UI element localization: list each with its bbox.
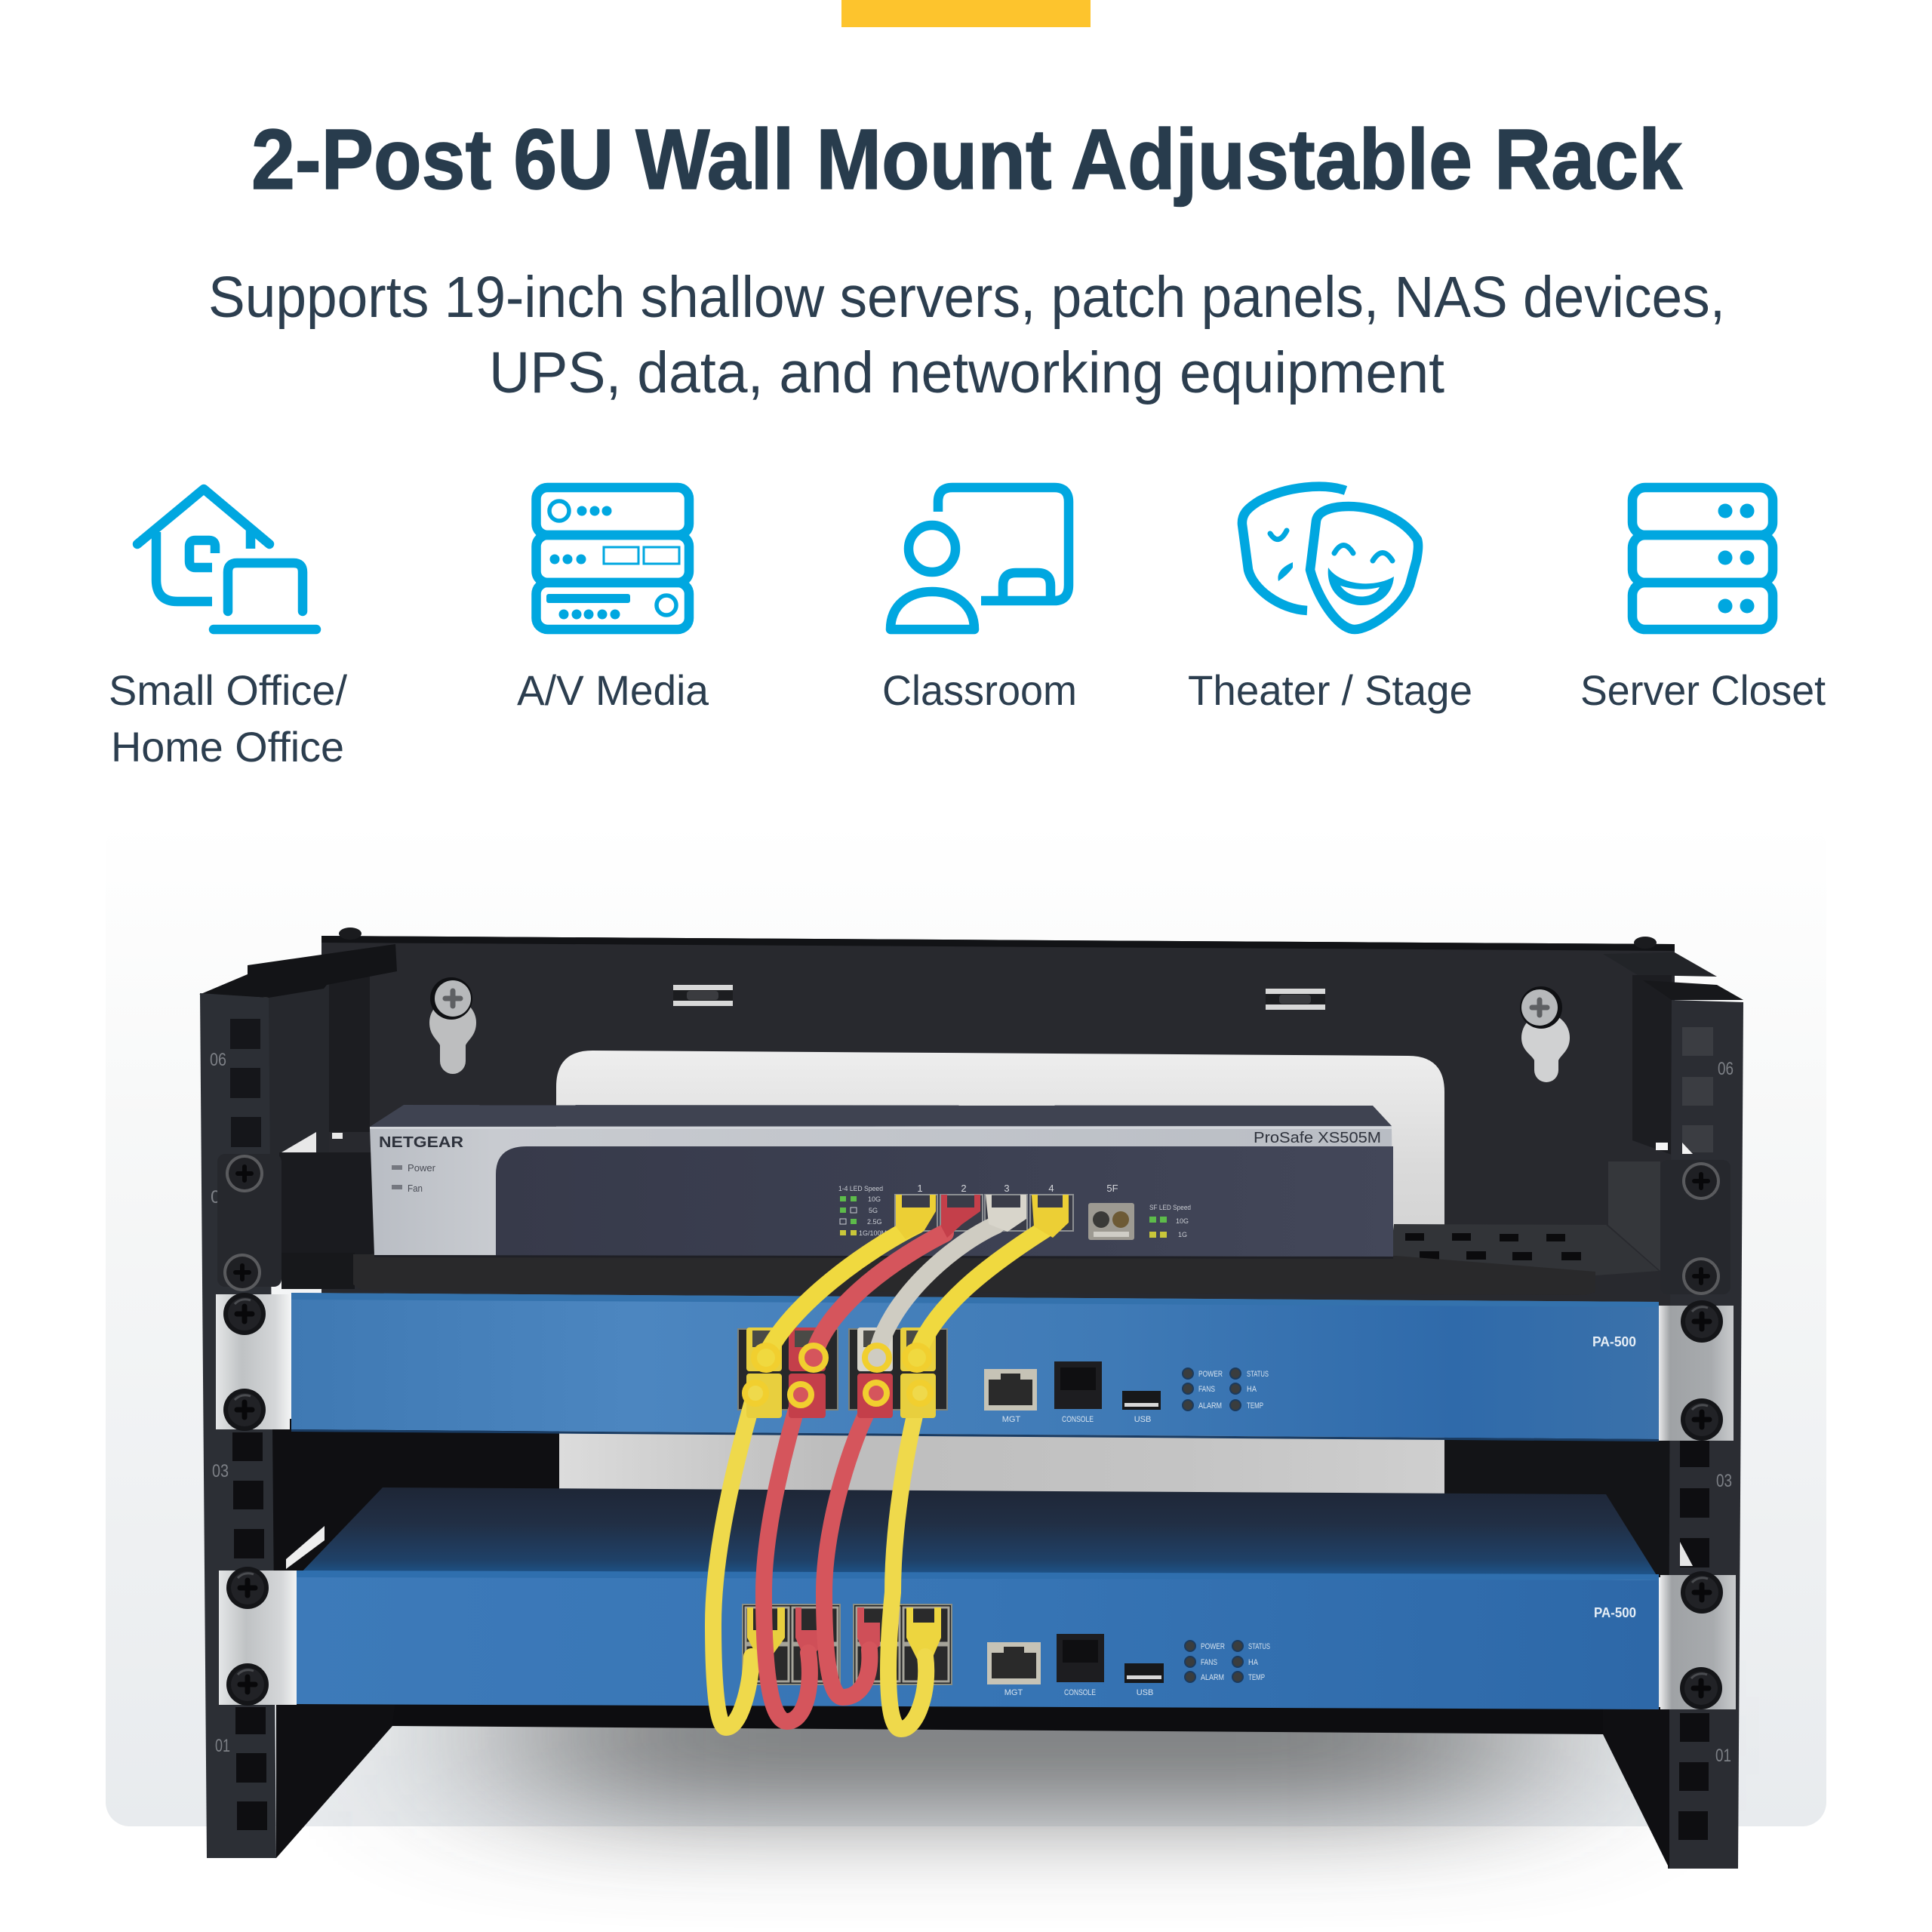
label: Theater / Stage <box>1188 666 1472 714</box>
port numbers <box>917 1183 1118 1194</box>
panel text and LEDs: CONSOLE <box>1062 1415 1094 1424</box>
panel: image background <box>106 823 1826 1826</box>
RJ45 ports <box>895 1195 1073 1231</box>
label: Home Office <box>111 723 344 771</box>
icon: house with laptop <box>137 489 316 629</box>
left rack post: 03 <box>212 1461 229 1481</box>
lower rack shelf and feet <box>276 1690 1669 1869</box>
panel text and LEDs: POWER <box>1198 1370 1223 1379</box>
panel text and LEDs: STATUS <box>1247 1370 1269 1379</box>
icon: person with screen <box>891 488 1069 629</box>
status LEDs: 1G/100M <box>859 1229 887 1237</box>
keyhole right with screw <box>1520 986 1570 1082</box>
brand and model text <box>379 1130 1381 1194</box>
label: Server Closet <box>1580 666 1826 714</box>
use case: server closet <box>1580 488 1826 714</box>
port numbers: 1 <box>917 1183 923 1194</box>
plate cutout window <box>556 1051 1444 1283</box>
left rack post: 01 <box>215 1736 230 1756</box>
photo: rack with mounted equipment <box>199 928 1743 1869</box>
subtitle <box>208 265 1725 405</box>
shelf mounting ears with screws <box>217 1154 1730 1295</box>
upper PA-500 firewall <box>291 1293 1659 1441</box>
lower device top surface <box>297 1487 1659 1579</box>
network ports <box>743 1604 952 1684</box>
left rack post: 06 <box>210 1050 226 1070</box>
Netgear switch <box>370 1105 1393 1259</box>
subtitle: UPS, data, and networking equipment <box>489 340 1444 405</box>
port numbers: 2 <box>961 1183 967 1194</box>
status LEDs <box>838 1185 1191 1238</box>
port numbers: 4 <box>1048 1183 1054 1194</box>
subtitle: Supports 19-inch shallow servers, patch panels, NAS devices, <box>208 265 1725 330</box>
label <box>109 666 347 771</box>
use case: A/V media <box>517 488 709 714</box>
title: 2-Post 6U Wall Mount Adjustable Rack <box>251 112 1682 207</box>
icon: A/V equipment stack <box>536 488 689 629</box>
keyhole left with screw <box>429 977 476 1074</box>
right rack post: 01 <box>1715 1746 1731 1766</box>
panel text and LEDs <box>1002 1368 1269 1424</box>
rear wall plate <box>321 928 1675 1317</box>
top accent bar <box>841 0 1091 27</box>
panel text and LEDs: STATUS <box>1248 1642 1270 1651</box>
long patch cables <box>713 1391 926 1729</box>
icon: theater masks <box>1242 487 1418 629</box>
panel text and LEDs: USB <box>1137 1688 1153 1697</box>
right rack post <box>1603 952 1743 1869</box>
label: A/V Media <box>517 666 709 714</box>
silver ears for firewalls with screws <box>216 1293 1736 1709</box>
status LEDs: 10G <box>1176 1217 1189 1225</box>
panel text and LEDs: POWER <box>1201 1642 1225 1651</box>
right rack post: 06 <box>1718 1059 1734 1079</box>
panel text and LEDs: ALARM <box>1201 1673 1224 1682</box>
use case: classroom <box>882 488 1077 714</box>
panel text and LEDs: MGT <box>1002 1415 1020 1424</box>
management ports <box>984 1361 1161 1411</box>
panel text and LEDs: ALARM <box>1198 1401 1222 1411</box>
brand and model text: NETGEAR <box>379 1134 464 1151</box>
management ports <box>987 1634 1164 1684</box>
status LEDs: 1-4 LED Speed <box>838 1185 883 1192</box>
use case: small office / home office <box>109 489 347 771</box>
lower PA-500 firewall: PA-500 <box>1594 1605 1636 1620</box>
panel text and LEDs <box>1004 1641 1270 1697</box>
port numbers: 3 <box>1004 1183 1010 1194</box>
left rack post <box>199 944 397 1858</box>
switch plug heads <box>896 1195 1069 1239</box>
label: Classroom <box>882 666 1077 714</box>
panel text and LEDs: MGT <box>1004 1688 1023 1697</box>
panel text and LEDs: FANS <box>1201 1658 1217 1667</box>
use case: theater / stage <box>1188 487 1472 714</box>
status LEDs: 2.5G <box>867 1218 882 1226</box>
panel text and LEDs: CONSOLE <box>1064 1688 1096 1697</box>
brand and model text: ProSafe XS505M <box>1254 1130 1381 1146</box>
cable collars upper row <box>754 1346 929 1370</box>
panel text and LEDs: TEMP <box>1247 1401 1263 1411</box>
left rack post: 0 <box>211 1187 220 1208</box>
mounting slots <box>673 985 1325 1010</box>
upper port connectors <box>745 1327 936 1418</box>
status LEDs: 10G <box>868 1195 881 1203</box>
right rack post: 03 <box>1716 1471 1732 1491</box>
status LEDs: 1G <box>1178 1231 1187 1238</box>
panel text and LEDs: HA <box>1247 1385 1257 1394</box>
brand and model text: Fan <box>408 1183 423 1194</box>
panel text and LEDs: FANS <box>1198 1385 1215 1394</box>
icon: server stack <box>1632 488 1773 629</box>
shelf tray <box>279 1132 1660 1295</box>
status LEDs: 5G <box>869 1207 878 1214</box>
rear black background behind lower gap <box>272 1419 1686 1577</box>
label: Small Office/ <box>109 666 347 714</box>
short patch cables <box>766 1225 1044 1356</box>
lower port connectors <box>747 1607 941 1659</box>
SFP port <box>1088 1203 1134 1240</box>
lower PA-500 firewall <box>297 1571 1659 1709</box>
upper PA-500 firewall: PA-500 <box>1592 1334 1636 1349</box>
panel text and LEDs: HA <box>1248 1658 1259 1667</box>
brand and model text: Power <box>408 1162 436 1174</box>
status LEDs: SF LED Speed <box>1149 1204 1191 1211</box>
panel text and LEDs: TEMP <box>1248 1673 1265 1682</box>
floor shadow <box>528 1660 1509 1811</box>
panel text and LEDs: USB <box>1134 1415 1151 1424</box>
network ports <box>738 1329 947 1410</box>
port numbers: 5F <box>1106 1183 1118 1194</box>
